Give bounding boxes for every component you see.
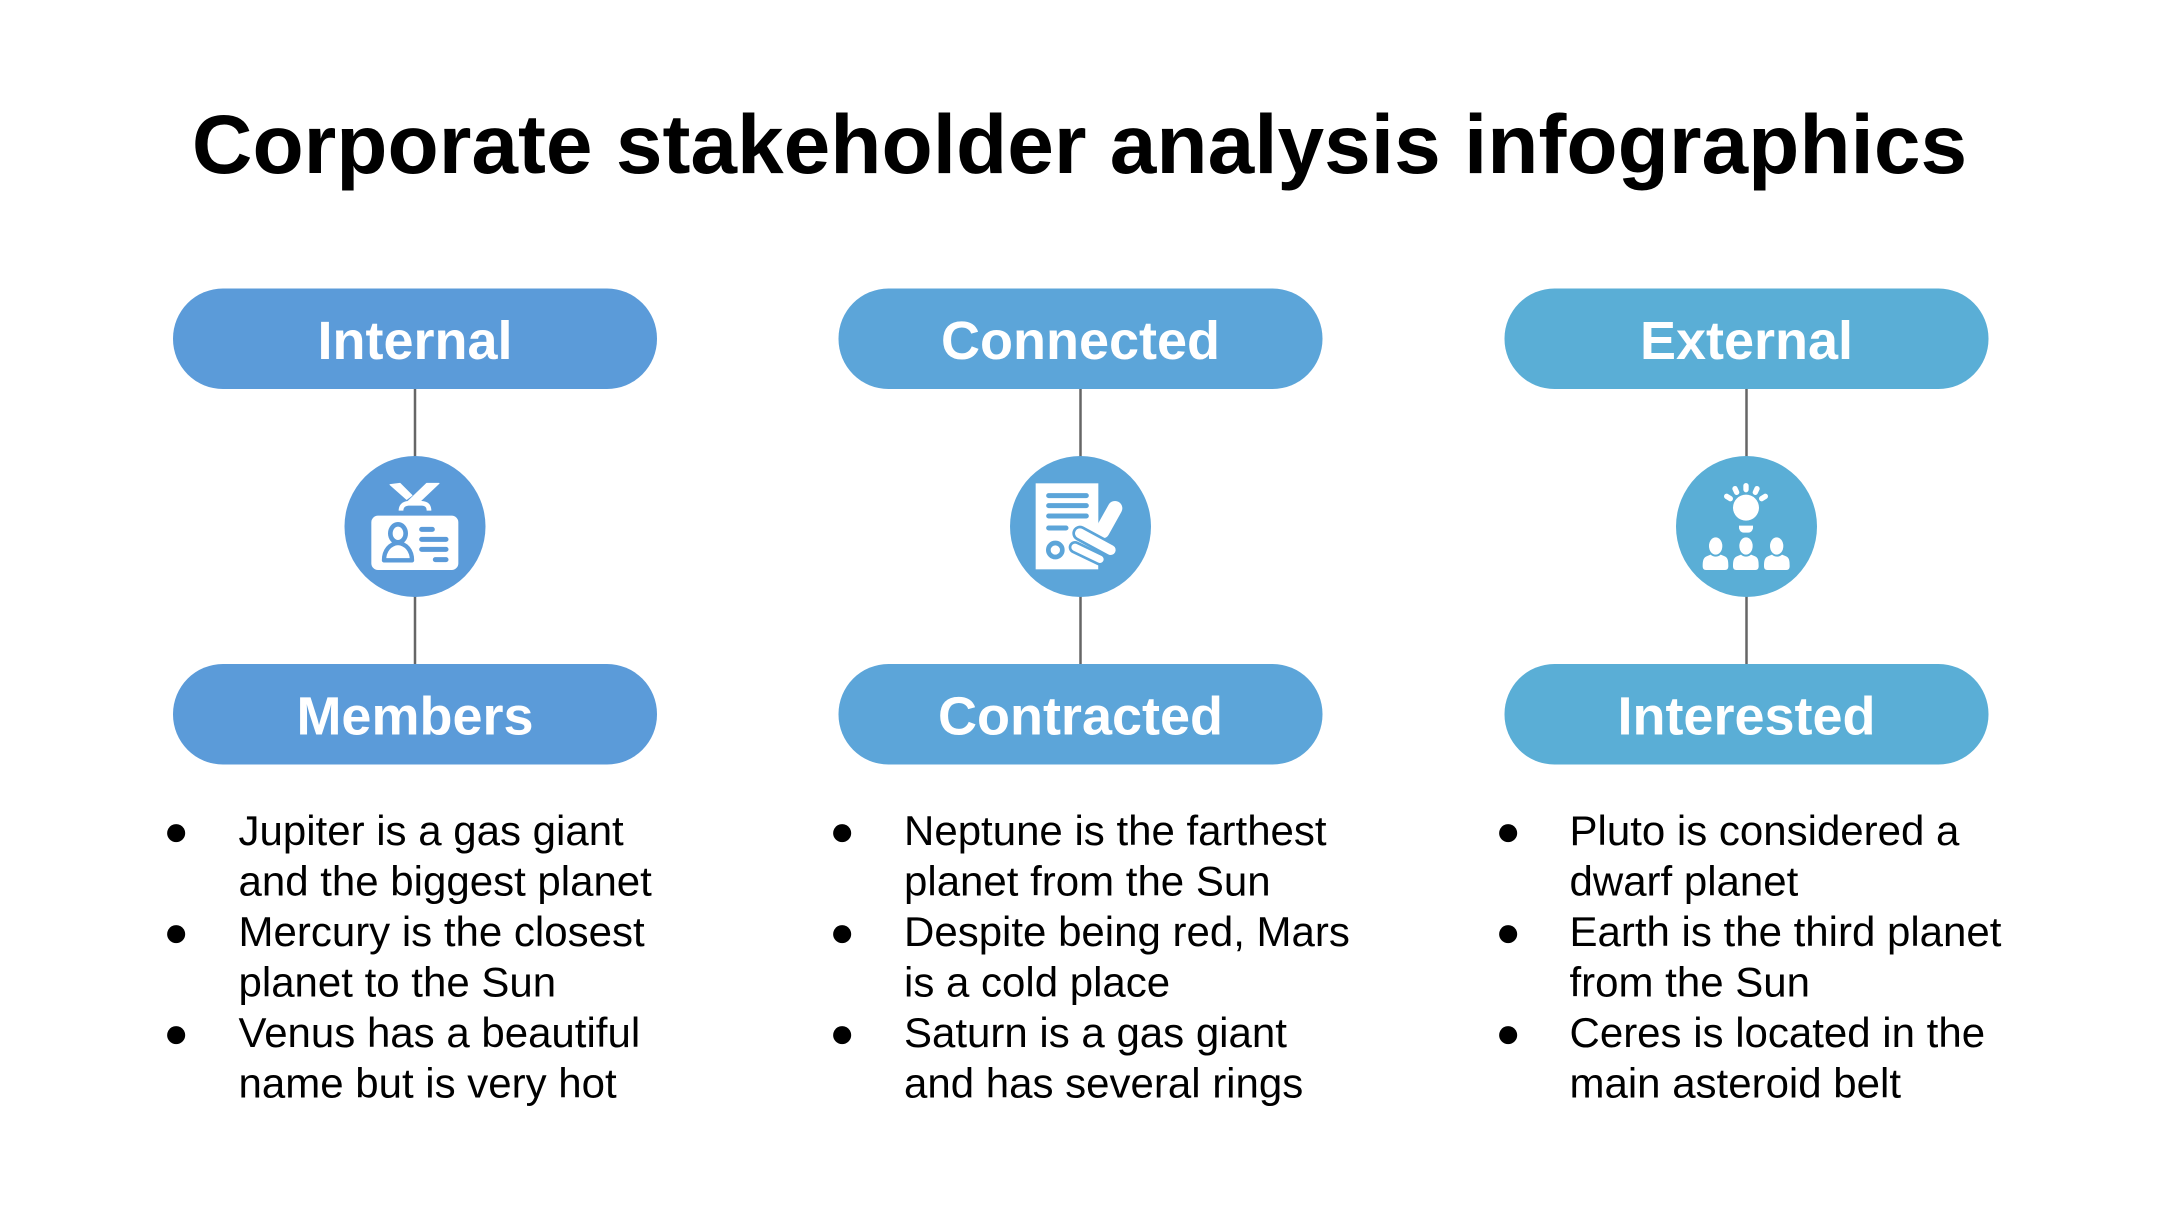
connector line (414, 388, 416, 665)
bullet list: connected (830, 807, 1350, 1106)
bullet list: internal: Venus has a beautiful (238, 1009, 640, 1056)
icon: people with idea bulb (1676, 456, 1817, 597)
bullet list: external: Pluto is considered a (1570, 807, 1960, 854)
bullet list: internal (164, 807, 652, 1106)
connector line (1079, 388, 1082, 665)
pill: Internal (173, 288, 657, 389)
panel: internal column (164, 288, 657, 1106)
pill: Contracted (838, 664, 1322, 764)
bullet list: external: ● (1496, 807, 1521, 854)
pill: Interested (1504, 664, 1988, 764)
bullet list: connected: Saturn is a gas giant (904, 1009, 1287, 1056)
bullet list: connected: Despite being red, Mars (904, 908, 1350, 955)
icon: ID badge (344, 456, 486, 597)
bullet list: internal: ● (164, 807, 189, 854)
pill: Members (173, 664, 657, 764)
bullet list: internal: Mercury is the closest (238, 908, 645, 955)
bullet list: internal: name but is very hot (238, 1060, 617, 1106)
bullet list: connected: ● (830, 1009, 855, 1056)
bullet list: internal: ● (164, 908, 189, 955)
bullet list: external: ● (1496, 908, 1521, 955)
bullet list: external: from the Sun (1570, 958, 1810, 1006)
bullet list: external (1496, 807, 2002, 1106)
bullet list: connected: is a cold place (904, 958, 1170, 1006)
bullet list: internal: ● (164, 1009, 189, 1056)
bullet list: internal: Jupiter is a gas giant (238, 807, 624, 854)
pill: Contracted: Contracted (938, 686, 1223, 746)
bullet list: connected: ● (830, 807, 855, 854)
bullet list: external: ● (1496, 1009, 1521, 1056)
pill: Interested: Interested (1617, 686, 1876, 746)
bullet list: external: Ceres is located in the (1570, 1009, 1985, 1056)
pill: Internal: Internal (317, 311, 513, 371)
title: Corporate stakeholder analysis infographics (192, 97, 1967, 191)
bullet list: external: dwarf planet (1570, 858, 1799, 904)
connector line (1745, 388, 1748, 665)
bullet list: external: main asteroid belt (1570, 1060, 1901, 1106)
panel: external column (1496, 288, 2002, 1106)
bullet list: connected: planet from the Sun (904, 858, 1271, 904)
pill: External (1504, 288, 1988, 389)
pill: External: External (1640, 311, 1853, 371)
icon: contract with stamp (1010, 456, 1151, 597)
pill: Members: Members (296, 686, 534, 746)
bullet list: internal: planet to the Sun (238, 958, 556, 1006)
panel: connected column (830, 288, 1350, 1106)
bullet list: connected: Neptune is the farthest (904, 807, 1327, 854)
pill: Connected (838, 288, 1322, 389)
bullet list: connected: and has several rings (904, 1060, 1303, 1106)
pill: Connected: Connected (941, 311, 1220, 371)
bullet list: connected: ● (830, 908, 855, 955)
bullet list: internal: and the biggest planet (238, 858, 652, 904)
bullet list: external: Earth is the third planet (1570, 908, 2002, 955)
